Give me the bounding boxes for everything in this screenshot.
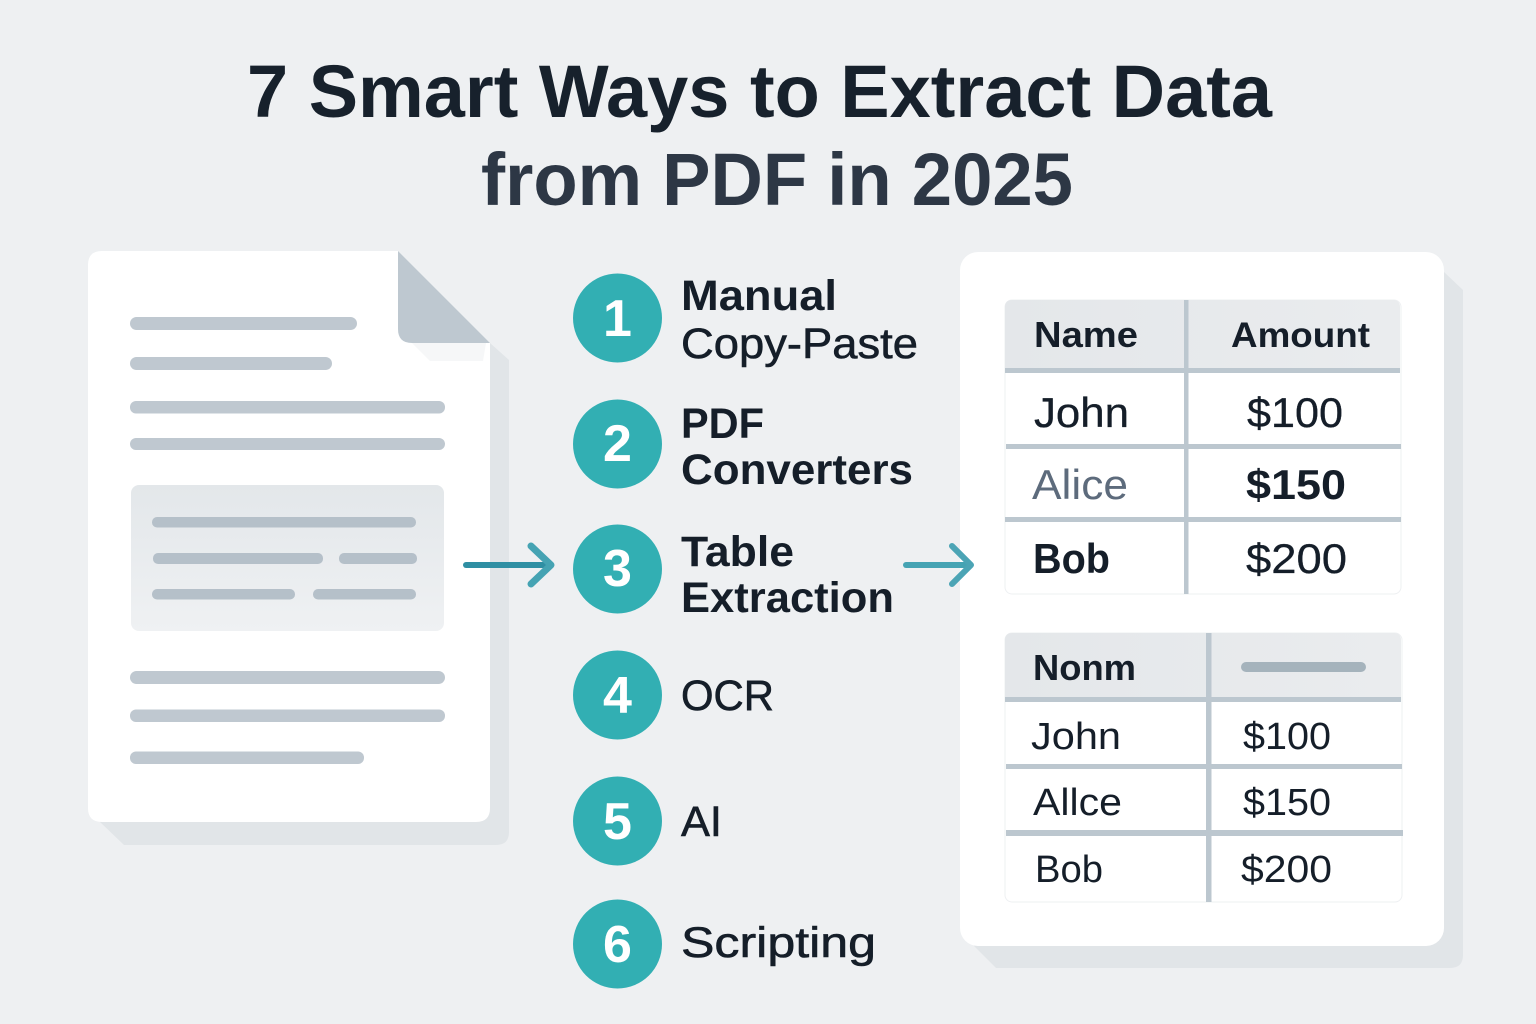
- method 2: Converters: [681, 446, 913, 494]
- method 3: 3: [603, 540, 632, 598]
- table 2: $200: [1241, 849, 1332, 891]
- table 1: Alice: [1032, 461, 1128, 508]
- method 4: OCR: [681, 672, 774, 720]
- method 1: 1: [603, 290, 632, 348]
- title: [247, 50, 1273, 221]
- method 3: Table: [681, 528, 794, 576]
- text lines: top: [130, 317, 445, 450]
- table 1: Bob: [1033, 535, 1110, 582]
- method 6: 6: [603, 916, 632, 974]
- card shadow: [974, 272, 1463, 968]
- arrow: methods to tables: [906, 546, 971, 584]
- method 2: [573, 400, 913, 494]
- method 4: [573, 650, 774, 740]
- table 2: Allce: [1033, 782, 1122, 824]
- method 5: 5: [603, 793, 632, 851]
- method 5: AI: [681, 798, 722, 846]
- text lines: bottom: [130, 671, 445, 764]
- method 3: [573, 524, 894, 622]
- table 1: John: [1034, 389, 1129, 436]
- method 1: Manual: [681, 272, 837, 320]
- table 1: [1005, 300, 1401, 594]
- table 2: $100: [1243, 716, 1331, 758]
- placeholder header bar: [1241, 662, 1366, 672]
- card: [960, 252, 1444, 946]
- table 1: Amount: [1231, 316, 1370, 355]
- fold shadow: [412, 343, 486, 361]
- table 1: Name: [1034, 314, 1138, 355]
- table 2: Bob: [1035, 849, 1103, 891]
- method 2: 2: [603, 415, 632, 473]
- table 2: $150: [1243, 782, 1331, 824]
- title: 7 Smart Ways to Extract Data: [247, 50, 1273, 133]
- method 6: Scripting: [681, 919, 876, 967]
- method 3: Extraction: [681, 574, 894, 622]
- table 2: Nonm: [1033, 647, 1136, 688]
- table 1: $150: [1246, 461, 1346, 508]
- folded corner: [398, 251, 490, 343]
- method 5: [573, 776, 722, 866]
- embedded table block: [131, 485, 444, 631]
- table 2: John: [1031, 716, 1121, 758]
- table 2: [1005, 633, 1403, 902]
- panel: extracted tables: [960, 252, 1463, 968]
- panel: PDF document: [88, 251, 509, 845]
- method 6: [573, 900, 876, 988]
- document shadow: [100, 343, 509, 845]
- arrow: document to methods: [466, 546, 551, 584]
- table 1: $200: [1246, 535, 1347, 582]
- method 1: Copy-Paste: [681, 320, 918, 368]
- document page: [88, 251, 490, 822]
- title: from PDF in 2025: [481, 138, 1073, 221]
- table 1: $100: [1247, 389, 1343, 436]
- method 1: [573, 272, 918, 368]
- method 4: 4: [603, 667, 632, 725]
- method 2: PDF: [681, 400, 764, 448]
